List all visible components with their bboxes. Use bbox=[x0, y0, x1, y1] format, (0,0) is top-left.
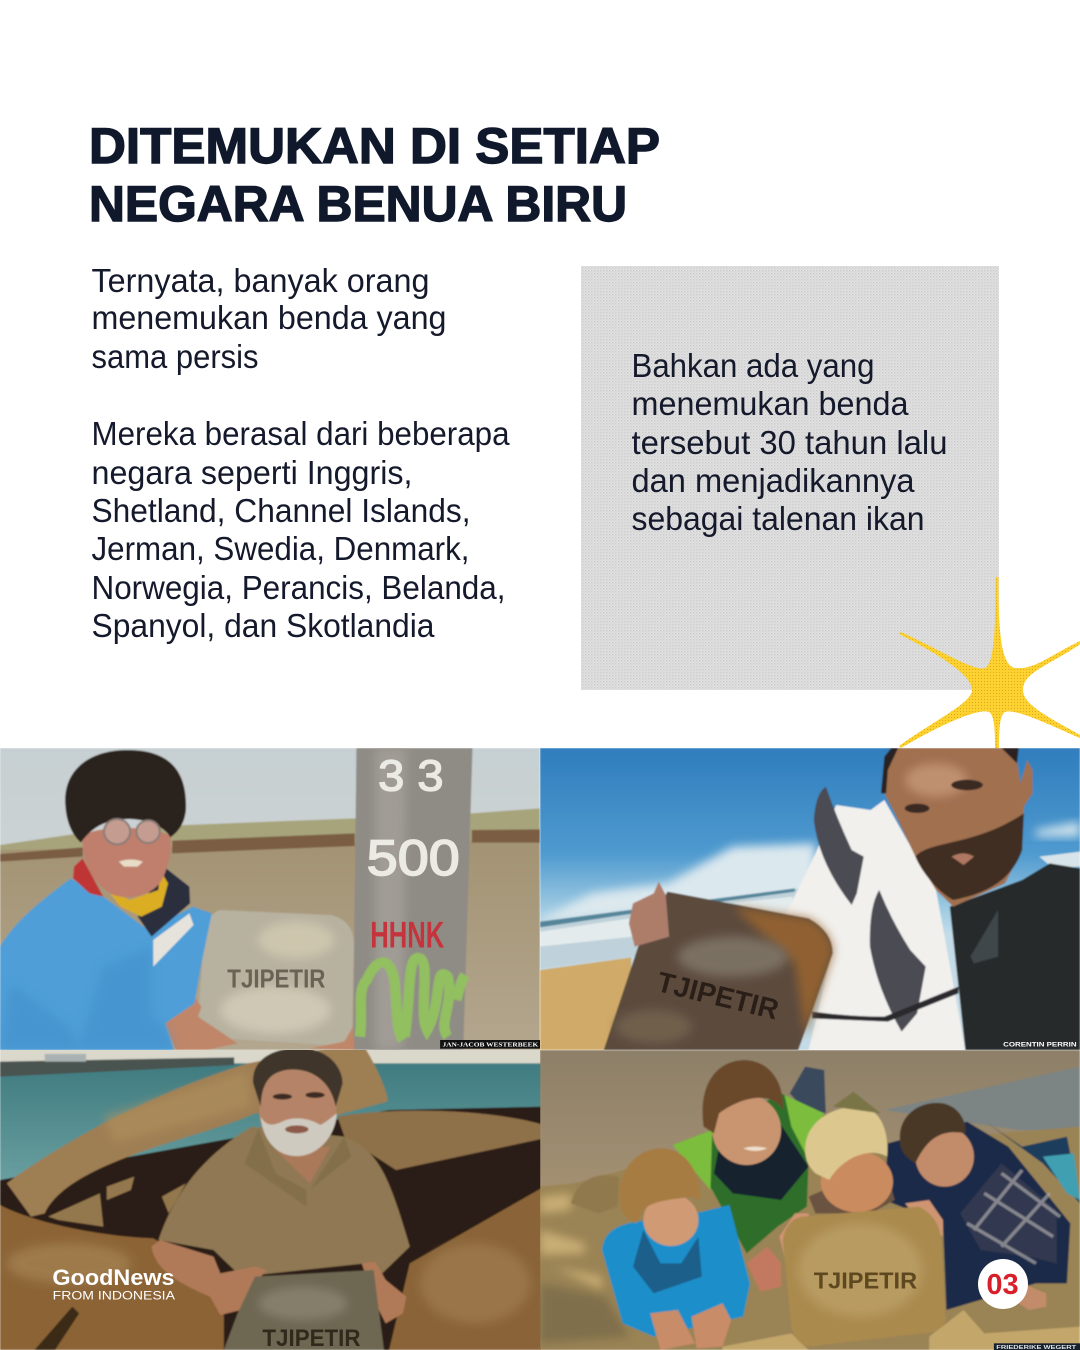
callout text: Bahkan ada yang bbox=[632, 347, 874, 384]
post markings: 500 bbox=[367, 830, 460, 886]
post markings: HHNK bbox=[370, 914, 444, 955]
callout text: menemukan benda bbox=[632, 385, 909, 422]
text block: list of countries: Norwegia, Perancis, Belanda, bbox=[92, 569, 506, 606]
page number badge: 03 bbox=[986, 1269, 1019, 1301]
title bbox=[89, 118, 660, 232]
text block: list of countries: Spanyol, dan Skotlandia bbox=[92, 607, 435, 644]
logo: GoodNews from Indonesia bbox=[52, 1265, 176, 1303]
callout text: tersebut 30 tahun lalu bbox=[632, 424, 948, 461]
photo: family lying on sand with stone bbox=[540, 1050, 1080, 1350]
text block: list of countries: Jerman, Swedia, Denmark, bbox=[92, 530, 470, 567]
callout text: dan menjadikannya bbox=[632, 462, 915, 499]
logo: GoodNews from Indonesia: GoodNews bbox=[52, 1265, 175, 1290]
text block: intro paragraph: menemukan benda yang bbox=[92, 299, 446, 336]
photo credit: CORENTIN PERRIN bbox=[1003, 1042, 1077, 1049]
photo credit: JAN-JACOB WESTERBEEK bbox=[443, 1042, 539, 1049]
photo credit bbox=[994, 1343, 1080, 1350]
photo: bearded man on coastal rocks bbox=[0, 1050, 541, 1350]
post markings: TJIPETIR bbox=[227, 964, 325, 993]
title: NEGARA BENUA BIRU bbox=[89, 176, 627, 232]
text block: list of countries bbox=[92, 415, 510, 644]
text block: list of countries: negara seperti Inggris, bbox=[92, 454, 412, 491]
stone lettering: TJIPETIR bbox=[814, 1268, 917, 1294]
callout text bbox=[632, 347, 948, 537]
title: DITEMUKAN DI SETIAP bbox=[89, 118, 660, 174]
text block: list of countries: Mereka berasal dari beberapa bbox=[92, 415, 510, 452]
text block: intro paragraph: sama persis bbox=[92, 338, 258, 375]
text block: intro paragraph bbox=[92, 262, 446, 375]
callout text: sebagai talenan ikan bbox=[632, 500, 924, 537]
text block: intro paragraph: Ternyata, banyak orang bbox=[92, 262, 430, 299]
icon: yellow sparkle star bbox=[899, 577, 1080, 748]
photo: surfer with rusty stone and surfboard bbox=[540, 748, 1080, 1050]
panel: grey callout bbox=[581, 266, 999, 690]
text block: list of countries: Shetland, Channel Islands, bbox=[92, 492, 470, 529]
post markings: 3 3 bbox=[378, 752, 444, 801]
stone lettering: TJIPETIR bbox=[654, 967, 782, 1026]
photo: man with fur hat and stone beside post bbox=[0, 748, 540, 1050]
post markings bbox=[227, 752, 460, 993]
logo: GoodNews from Indonesia: FROM INDONESIA bbox=[53, 1289, 176, 1303]
page number badge bbox=[978, 1259, 1028, 1309]
